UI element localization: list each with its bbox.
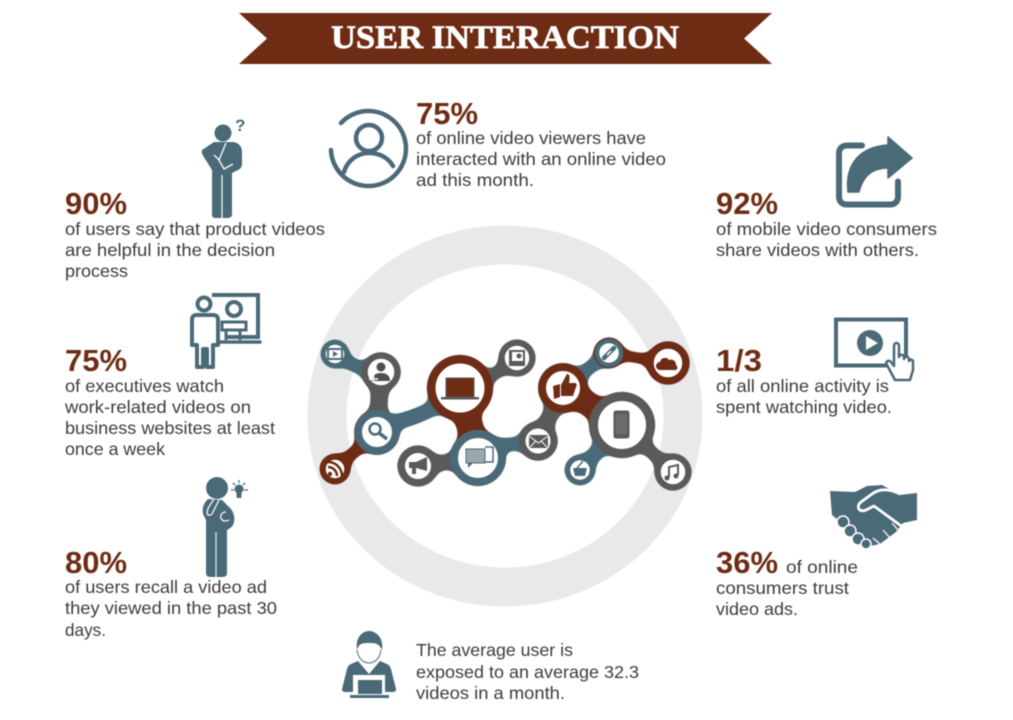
node: mail <box>523 426 553 456</box>
icon: thinking person <box>202 116 245 218</box>
node: basket <box>568 458 592 482</box>
stat: 36% trust: of online <box>786 557 858 577</box>
icon: presenter at screen <box>192 295 260 367</box>
stat: 36% trust: video ads. <box>716 599 798 619</box>
node: laptop <box>432 360 488 416</box>
node: link <box>597 341 621 365</box>
stat: 80% users: of users recall a video ad <box>65 577 267 597</box>
stat: 92% mobile <box>716 186 937 260</box>
stat: 90% users: 90% <box>65 186 127 221</box>
stat: 80% users: days. <box>65 620 106 640</box>
node: rss <box>324 458 346 480</box>
stat: 75% executives: business websites at least <box>65 418 275 438</box>
stat: 1/3 activity: of all online activity is <box>716 376 889 396</box>
stat: 80% users: they viewed in the past 30 <box>65 598 277 618</box>
stat: 75% executives: 75% <box>65 343 127 378</box>
stat: 75% viewers: of online video viewers have <box>416 128 646 148</box>
stat: 75% viewers: 75% <box>416 96 478 131</box>
background ring <box>327 245 683 587</box>
node: megaphone <box>402 450 434 482</box>
icon: handshake <box>830 485 917 549</box>
title banner <box>239 13 772 64</box>
text: average user: videos in a month. <box>416 683 565 703</box>
icon: user in circle <box>331 111 406 186</box>
node: phone <box>594 398 650 452</box>
stat: 36% trust <box>716 545 858 619</box>
stat: 75% viewers <box>416 96 666 190</box>
node: music <box>658 458 688 486</box>
stat: 92% mobile: share videos with others. <box>716 240 919 260</box>
icon: share arrow <box>839 137 912 204</box>
stat: 92% mobile: 92% <box>716 186 778 221</box>
node: cloud <box>651 346 685 380</box>
node: like <box>543 368 583 408</box>
stat: 75% viewers: ad this month. <box>416 170 534 190</box>
stat: 75% executives: work-related videos on <box>64 397 251 417</box>
stat: 75% viewers: interacted with an online video <box>416 149 666 169</box>
stat: 1/3 activity <box>716 343 892 417</box>
stat: 1/3 activity: spent watching video. <box>716 397 892 417</box>
icon network <box>321 339 690 489</box>
icon: person with idea <box>203 477 248 577</box>
title banner: USER INTERACTION <box>331 20 679 56</box>
stat: 90% users: process <box>65 261 128 281</box>
icon: person at laptop <box>342 631 396 698</box>
node: search <box>359 414 395 450</box>
text: average user: exposed to an average 32.3 <box>416 662 639 682</box>
stat: 75% executives: once a week <box>65 439 165 459</box>
stat: 90% users <box>65 186 325 281</box>
text: average user: The average user is <box>416 640 573 660</box>
stat: 92% mobile: of mobile video consumers <box>716 219 937 239</box>
icon: video play with hand <box>836 320 913 380</box>
stat: 80% users <box>65 545 277 640</box>
node: chat <box>455 435 501 481</box>
node: add user <box>366 356 396 388</box>
icon: thinking person: ? <box>235 116 245 135</box>
stat: 75% executives: of executives watch <box>65 376 224 396</box>
stat: 1/3 activity: 1/3 <box>716 343 762 378</box>
stat: 36% trust: 36% <box>716 545 778 580</box>
stat: 90% users: are helpful in the decision <box>65 240 275 260</box>
stat: 36% trust: consumers trust <box>716 578 849 598</box>
stat: 90% users: of users say that product videos <box>65 219 325 239</box>
node: video <box>324 342 346 366</box>
stat: 75% executives <box>64 343 275 459</box>
text: average user <box>416 640 639 703</box>
connectors <box>321 339 690 489</box>
stat: 80% users: 80% <box>65 545 127 580</box>
node: photo <box>502 344 532 372</box>
